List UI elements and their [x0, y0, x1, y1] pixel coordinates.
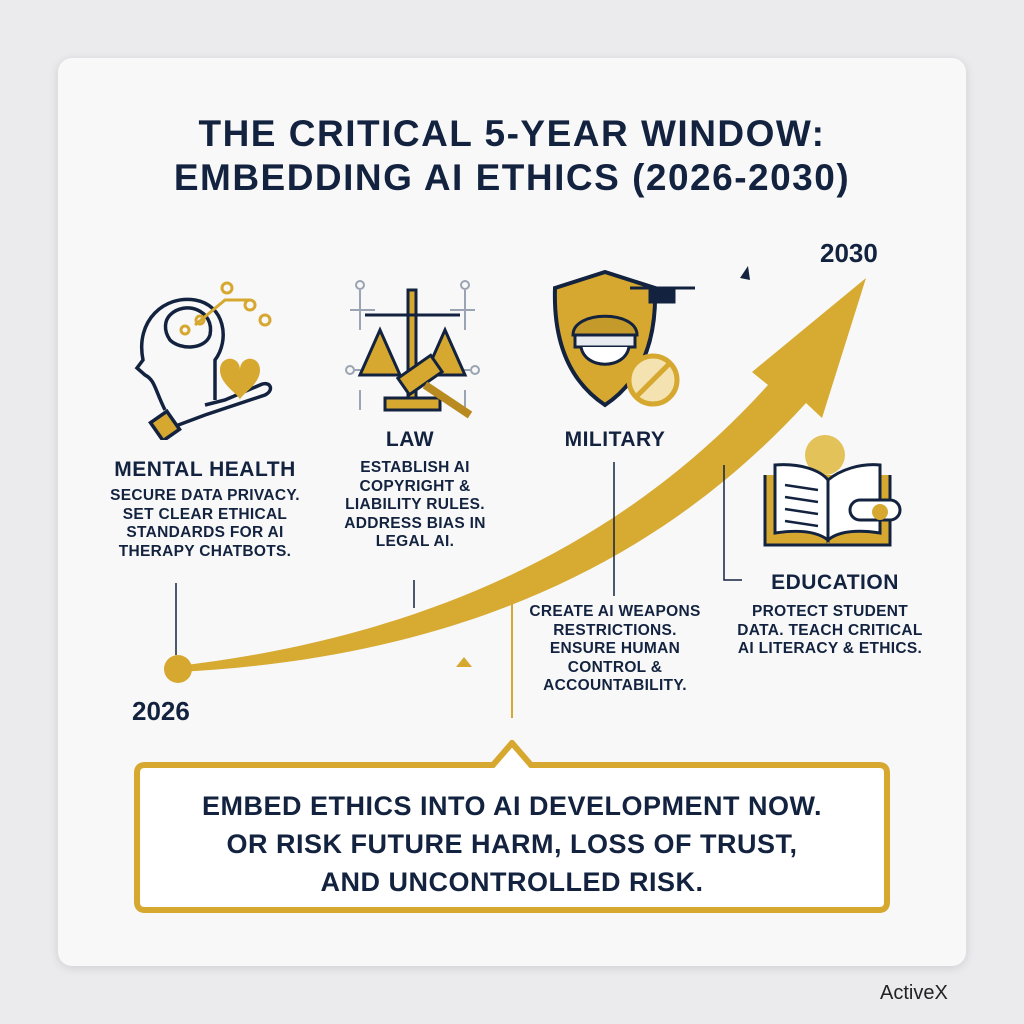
text: law: [344, 459, 486, 550]
callout box: [134, 740, 890, 913]
text: military: RESTRICTIONS.: [553, 622, 677, 639]
text: law: COPYRIGHT &: [360, 478, 470, 495]
text: mental health: THERAPY CHATBOTS.: [119, 543, 291, 560]
text: education: DATA. TEACH CRITICAL: [737, 622, 923, 639]
text: law: ESTABLISH AI: [360, 459, 470, 476]
callout text: OR RISK FUTURE HARM, LOSS OF TRUST,: [226, 829, 798, 859]
text: law: LIABILITY RULES.: [345, 496, 485, 513]
label 2030: 2030: [820, 238, 878, 268]
heading: education: EDUCATION: [771, 571, 899, 594]
icon: military: [552, 270, 695, 408]
title: EMBEDDING AI ETHICS (2026-2030): [174, 157, 850, 198]
title: [174, 113, 850, 198]
text: education: PROTECT STUDENT: [752, 603, 908, 620]
text: military: CREATE AI WEAPONS: [529, 603, 701, 620]
text: military: [529, 603, 701, 694]
icon: mental health: [134, 282, 272, 440]
text: military: CONTROL &: [568, 659, 662, 676]
text: law: LEGAL AI.: [376, 533, 454, 550]
logo: ActiveX: [880, 982, 948, 1004]
icon: law: [345, 280, 480, 418]
heading: military: MILITARY: [565, 428, 665, 451]
text: military: ENSURE HUMAN: [550, 640, 680, 657]
text: mental health: SET CLEAR ETHICAL: [123, 506, 287, 523]
title: THE CRITICAL 5-YEAR WINDOW:: [198, 113, 826, 154]
heading: mental health: MENTAL HEALTH: [114, 458, 296, 481]
callout text: EMBED ETHICS INTO AI DEVELOPMENT NOW.: [202, 791, 822, 821]
text: mental health: STANDARDS FOR AI: [126, 524, 284, 541]
text: military: ACCOUNTABILITY.: [543, 677, 687, 694]
text: education: [737, 603, 923, 657]
text: education: AI LITERACY & ETHICS.: [738, 640, 922, 657]
text: law: ADDRESS BIAS IN: [344, 515, 486, 532]
text: mental health: SECURE DATA PRIVACY.: [110, 487, 300, 504]
heading: law: LAW: [386, 428, 434, 451]
text: mental health: [110, 487, 300, 560]
callout text: AND UNCONTROLLED RISK.: [320, 867, 704, 897]
callout text: [202, 791, 822, 897]
card panel: [58, 58, 966, 966]
label 2026: 2026: [132, 696, 190, 726]
icon: education: [764, 435, 902, 546]
